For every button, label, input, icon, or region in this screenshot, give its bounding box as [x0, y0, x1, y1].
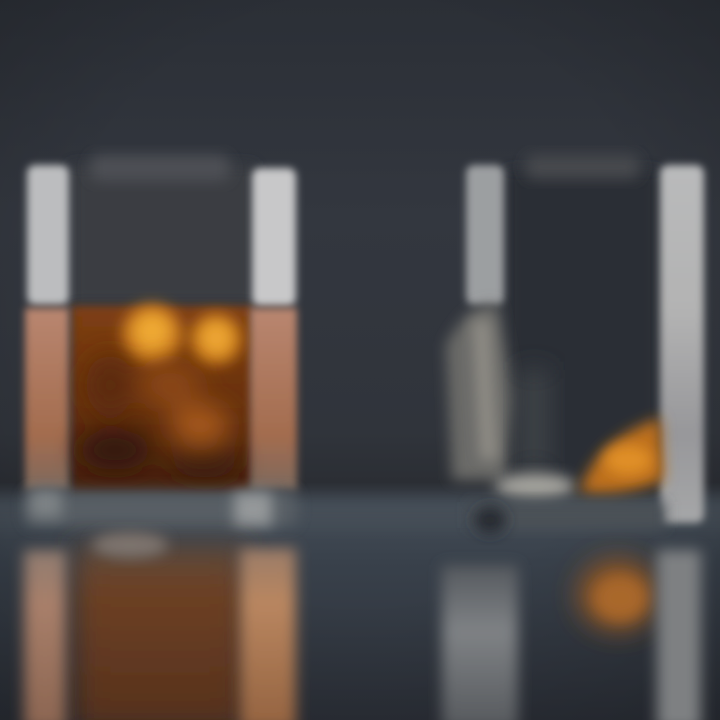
left wall lower	[446, 304, 514, 480]
orange slice	[580, 418, 664, 494]
glass back interior	[505, 170, 660, 490]
glass base	[470, 502, 665, 528]
glass back interior	[70, 165, 255, 305]
left glass reflection	[24, 532, 296, 720]
right glass reflection	[442, 550, 701, 720]
glass rim	[90, 155, 230, 181]
right glass wall lower	[250, 308, 297, 490]
whisky body	[72, 306, 252, 492]
right wall	[660, 165, 704, 523]
glass rim	[525, 155, 640, 179]
right glass wall upper	[252, 168, 296, 306]
white residue at base	[495, 473, 575, 499]
interior faint streak	[520, 370, 548, 470]
right glass, empty with orange slice	[446, 155, 704, 534]
left wall upper	[466, 165, 504, 305]
left glass wall lower	[25, 308, 69, 490]
left glass with whisky	[25, 155, 297, 526]
ice cube glows	[122, 304, 242, 365]
left glass wall upper	[27, 165, 69, 305]
glass base	[25, 490, 297, 526]
whisky mottling	[79, 355, 239, 478]
